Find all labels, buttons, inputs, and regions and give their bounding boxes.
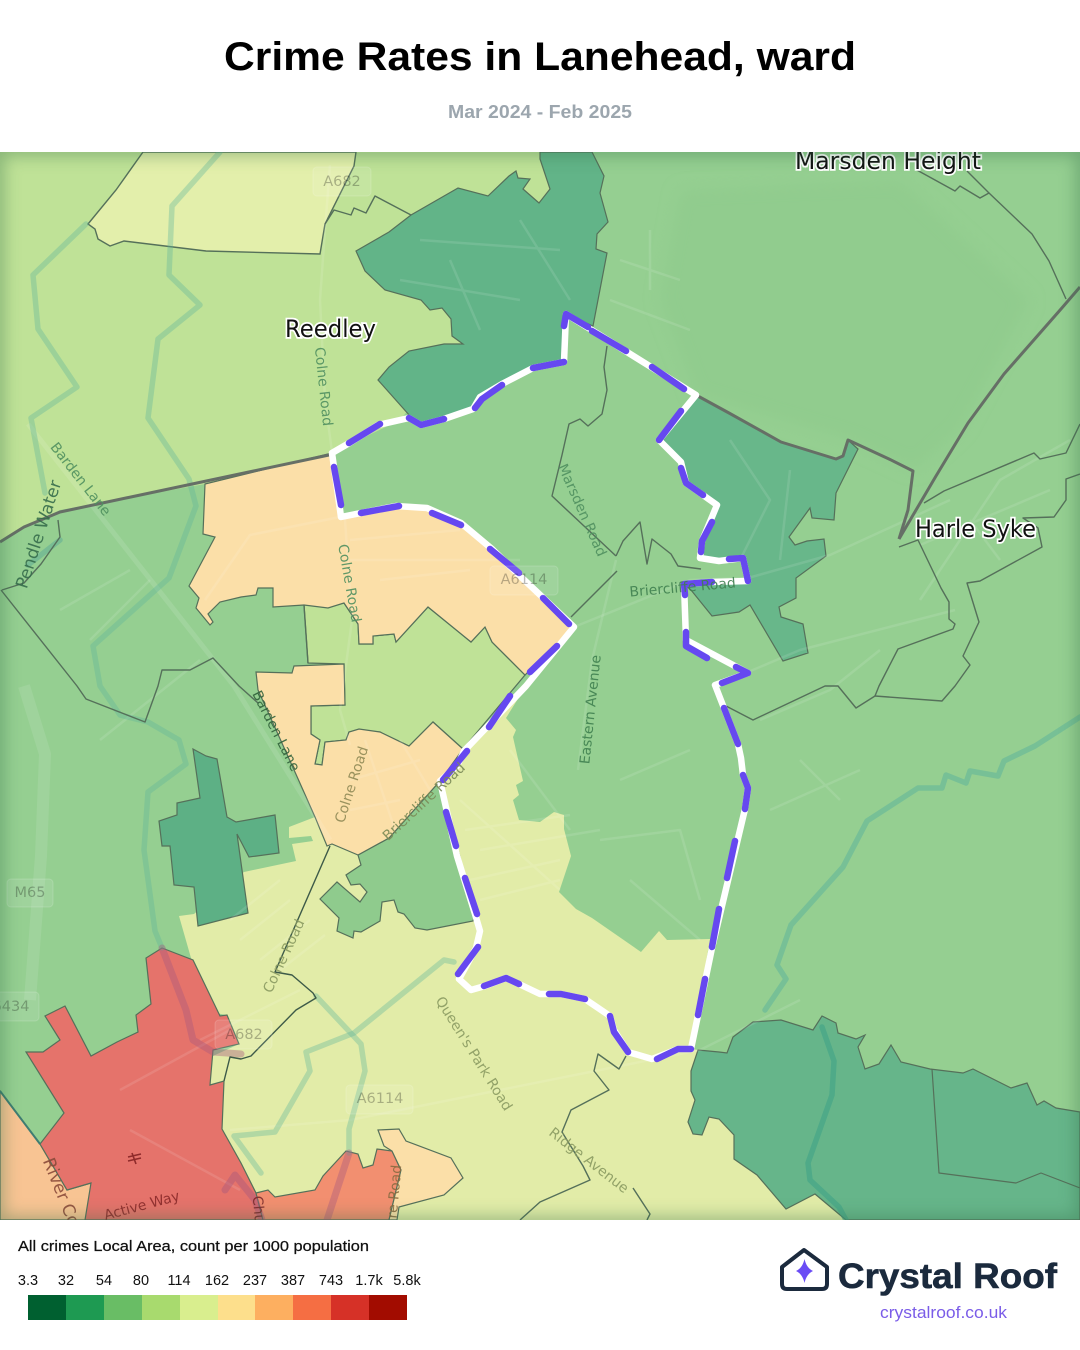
region: dark green east [659, 396, 858, 661]
legend tick labels: 5.8k [393, 1273, 421, 1289]
place labels: Reedley [285, 315, 376, 343]
region: salmon south [256, 1149, 401, 1220]
region: medium green piece by Briercliffe Road [320, 781, 475, 938]
road badges: A6114 [357, 1091, 403, 1107]
website url: crystalroof.co.uk [880, 1304, 1008, 1322]
legend tick labels: 32 [58, 1273, 74, 1289]
road badges [0, 167, 558, 1114]
road labels: Colne Road [311, 346, 335, 427]
road labels [12, 346, 736, 1229]
legend tick labels: 162 [205, 1273, 229, 1289]
road network [24, 165, 1070, 1190]
road labels: Briercliffe Road [629, 575, 736, 601]
icon: railway station [128, 1153, 141, 1164]
legend tick labels: 80 [133, 1273, 149, 1289]
region: peach north of ward [189, 453, 574, 675]
road labels: Colne Road [332, 745, 372, 825]
boundary lines [0, 169, 1080, 1220]
road labels: Barden Lane [248, 688, 303, 774]
region: light yellow south [179, 686, 846, 1220]
road labels: Barden Lane [47, 440, 114, 519]
region: dark green south-east [688, 1016, 1080, 1220]
road labels: re Road [385, 1164, 405, 1219]
road labels: Marsden Road [554, 462, 609, 559]
legend tick labels: 237 [243, 1273, 267, 1289]
thick authority boundaries [0, 287, 1080, 542]
road labels: Pendle Water [12, 478, 66, 591]
road labels: Colne Road [334, 543, 364, 624]
legend tick labels: 743 [319, 1273, 343, 1289]
legend title: All crimes Local Area, count per 1000 population [18, 1239, 369, 1255]
road labels: Ridge Avenue [546, 1125, 631, 1197]
logo wordmark: Crystal Roof [838, 1257, 1057, 1296]
road badges: A682 [225, 1027, 263, 1043]
road labels: Colne Road [260, 917, 308, 996]
legend tick labels: 387 [281, 1273, 305, 1289]
subtitle: date range: Mar 2024 - Feb 2025 [448, 101, 632, 122]
region: peach Colne Road [256, 664, 463, 855]
title [224, 35, 856, 122]
legend tick labels: 1.7k [355, 1273, 383, 1289]
legend colour bar [28, 1295, 407, 1320]
road labels: Eastern Avenue [577, 654, 605, 765]
icon: house with star [782, 1250, 827, 1289]
base area: medium crime [0, 152, 1080, 1220]
region: red high crime [26, 948, 263, 1220]
region: orange south-west [0, 1091, 91, 1220]
choropleth map [0, 152, 1080, 1220]
field shading top right [660, 180, 1030, 470]
ward boundary: Lanehead [332, 314, 748, 1059]
road labels: Briercliffe Road [380, 760, 469, 844]
legend tick labels: 54 [96, 1273, 112, 1289]
road labels: Queen's Park Road [432, 994, 515, 1114]
region: light green centre [304, 603, 525, 765]
region: peach south [378, 1129, 463, 1220]
region: dark green west [159, 749, 279, 926]
rivers [28, 152, 1080, 1220]
road badges: M65 [15, 885, 45, 901]
title: Crime Rates in Lanehead, ward [224, 35, 856, 79]
place labels: Harle Syke [915, 515, 1036, 543]
region: light green north-west [0, 152, 552, 542]
region: light yellow north [88, 152, 356, 254]
map edge vignette [0, 152, 1080, 1220]
legend [18, 1239, 421, 1320]
logo: Crystal Roof [780, 1248, 1058, 1322]
road badges: A6114 [501, 572, 547, 588]
region: dark green north [356, 152, 608, 425]
legend tick labels: 3.3 [18, 1273, 38, 1289]
legend tick labels: 114 [167, 1273, 191, 1289]
legend tick labels [18, 1273, 421, 1289]
road badges: A682 [323, 174, 361, 190]
place labels [285, 147, 1036, 543]
